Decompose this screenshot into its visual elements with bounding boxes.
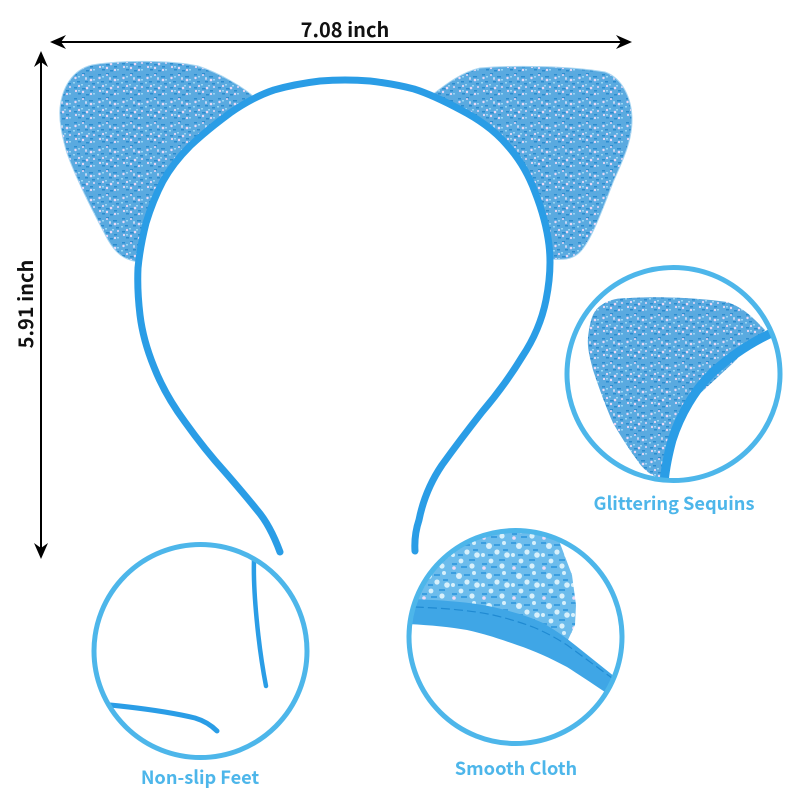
band xyxy=(138,80,550,552)
width dimension arrow xyxy=(50,35,632,49)
headband product xyxy=(60,61,632,552)
height label: 5.91 inch xyxy=(10,260,39,348)
width label: 7.08 inch xyxy=(301,14,389,43)
circle outline xyxy=(409,530,622,744)
vertical foot xyxy=(254,560,266,686)
label: smooth cloth: Smooth Cloth xyxy=(455,755,577,781)
band close-up xyxy=(664,331,776,484)
ear close-up xyxy=(588,297,765,482)
left glitter ear xyxy=(60,61,254,262)
right glitter ear xyxy=(432,66,632,259)
horizontal foot xyxy=(110,705,217,731)
panel: glittering sequins xyxy=(567,268,780,484)
cloth band close-up xyxy=(408,599,615,692)
circle outline xyxy=(567,268,780,480)
label: non-slip feet: Non-slip Feet xyxy=(141,764,260,790)
sequin close-up xyxy=(418,533,576,640)
circle outline xyxy=(94,544,307,758)
stitching xyxy=(415,607,612,678)
panel: non-slip feet xyxy=(94,544,307,758)
height dimension arrow xyxy=(34,51,48,559)
panel: smooth cloth xyxy=(405,526,622,744)
label: glittering sequins: Glittering Sequins xyxy=(594,490,754,516)
